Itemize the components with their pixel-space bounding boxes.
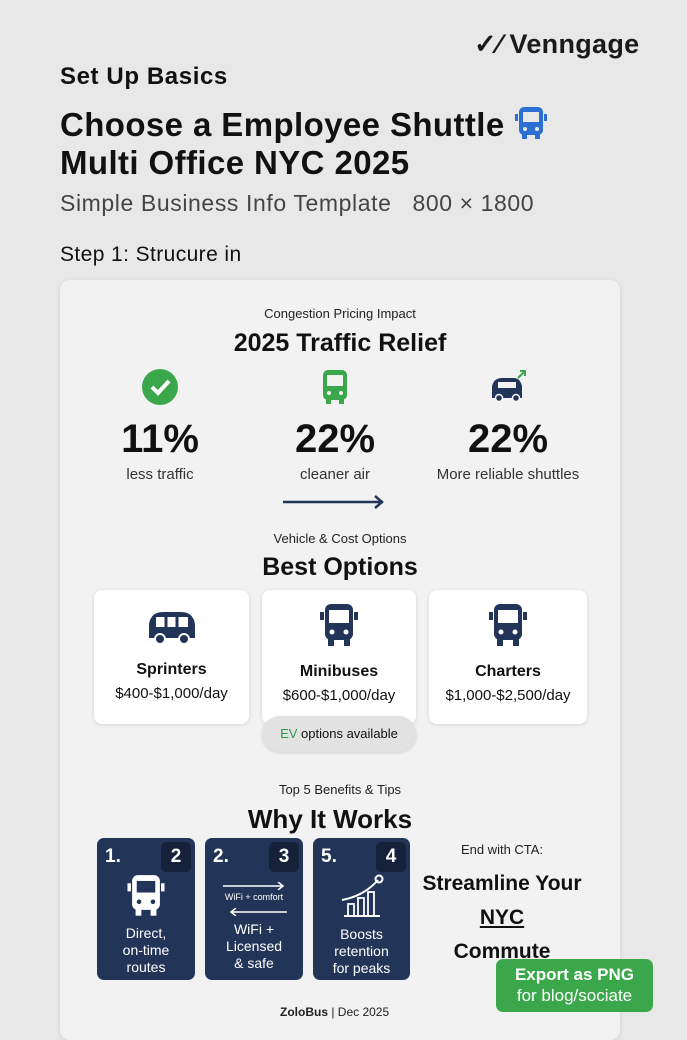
tile: 1 direct: 2 [171, 846, 181, 867]
pill: EV options [262, 716, 416, 752]
card: minibuses: $600-$1,000/day [283, 687, 395, 704]
card: minibuses [262, 590, 416, 724]
step label: Step 1: Strucure in [60, 243, 242, 266]
stat: 11%: 11% [121, 417, 199, 461]
icon: bus [489, 604, 527, 646]
kicker: Set Up Basics [60, 63, 228, 90]
stat: 22% reliable [437, 370, 579, 483]
card: charters: Charters [475, 663, 541, 680]
tile: 5 boosts: 5. [321, 846, 337, 867]
tile: 2 wifi [205, 838, 303, 980]
panel: main [60, 280, 620, 1040]
section heading: traffic relief: 2025 Traffic Relief [234, 329, 446, 357]
CTA text: Streamline Your [422, 872, 582, 895]
CTA text [422, 842, 582, 963]
tile: 2 wifi: Licensed [226, 938, 282, 954]
card: charters: $1,000-$2,500/day [445, 687, 571, 704]
stat: 22% cleaner air: cleaner air [300, 466, 370, 483]
tile: 5 boosts: Boosts [340, 926, 383, 942]
section heading: why it works [248, 782, 412, 834]
icon: growth chart [342, 874, 384, 917]
subtitle: Simple Business Info Template 800 × 1800 [60, 190, 534, 216]
icon: van [149, 612, 195, 643]
section heading: best options [262, 531, 418, 581]
tile: 5 boosts: 4 [386, 846, 396, 867]
stat: 22% reliable: 22% [468, 417, 548, 461]
tile: 5 boosts: for peaks [333, 960, 390, 976]
icon: arrows [223, 882, 284, 890]
icon: bus [320, 604, 358, 646]
card: charters [429, 590, 587, 724]
CTA text: NYC [480, 906, 524, 929]
tile: 1 direct [97, 838, 195, 980]
section heading: why it works: Top 5 Benefits & Tips [279, 782, 401, 797]
card: sprinters [94, 590, 249, 724]
button: export: Export as PNG [515, 965, 634, 984]
pill: EV options: EV options available [280, 726, 398, 741]
card: minibuses: Minibuses [300, 663, 378, 680]
icon: green bus [323, 370, 347, 404]
title: Multi Office NYC 2025 [60, 144, 410, 181]
section heading: traffic relief [234, 306, 446, 357]
section heading: best options: Best Options [262, 553, 418, 581]
arrow [283, 495, 384, 509]
button: export [496, 959, 653, 1012]
stat: 22% cleaner air [295, 370, 375, 483]
stat: 22% cleaner air: 22% [295, 417, 375, 461]
tile: 2 wifi: 3 [279, 846, 289, 867]
tile: 2 wifi: WiFi + [234, 921, 274, 937]
tile: 2 wifi: 2. [213, 846, 229, 867]
tile: 1 direct: routes [127, 959, 165, 975]
tile: 2 wifi: WiFi + comfort [225, 892, 283, 902]
tile: 5 boosts [313, 838, 410, 980]
stat: 22% reliable: More reliable shuttles [437, 466, 579, 483]
section heading: traffic relief: Congestion Pricing Impact [264, 306, 416, 321]
tile: 2 wifi: & safe [234, 955, 274, 971]
title [60, 106, 547, 181]
tile: 1 direct: 1. [105, 846, 121, 867]
card: sprinters: $400-$1,000/day [115, 685, 228, 702]
stat: 11% [121, 369, 199, 483]
tile: 1 direct: Direct, [126, 925, 166, 941]
CTA text: Commute [454, 940, 550, 963]
icon: check [142, 369, 178, 405]
button: export: for blog/sociate [517, 986, 632, 1005]
section heading: why it works: Why It Works [248, 804, 412, 834]
title: Choose a Employee Shuttle [60, 106, 505, 143]
tile: 1 direct: on-time [123, 942, 169, 958]
tile: 5 boosts: retention [334, 943, 389, 959]
icon: van with arrow [492, 370, 526, 401]
section heading: best options: Vehicle & Cost Options [274, 531, 406, 546]
logo: Venngage: ✓⁄ Venngage [474, 29, 639, 59]
card: sprinters: Sprinters [136, 661, 207, 678]
icon: bus [127, 875, 165, 916]
CTA text: End with CTA: [461, 842, 543, 857]
footer: ZoloBus | Dec 2025 [280, 1005, 389, 1019]
stat: 11%: less traffic [126, 466, 194, 483]
